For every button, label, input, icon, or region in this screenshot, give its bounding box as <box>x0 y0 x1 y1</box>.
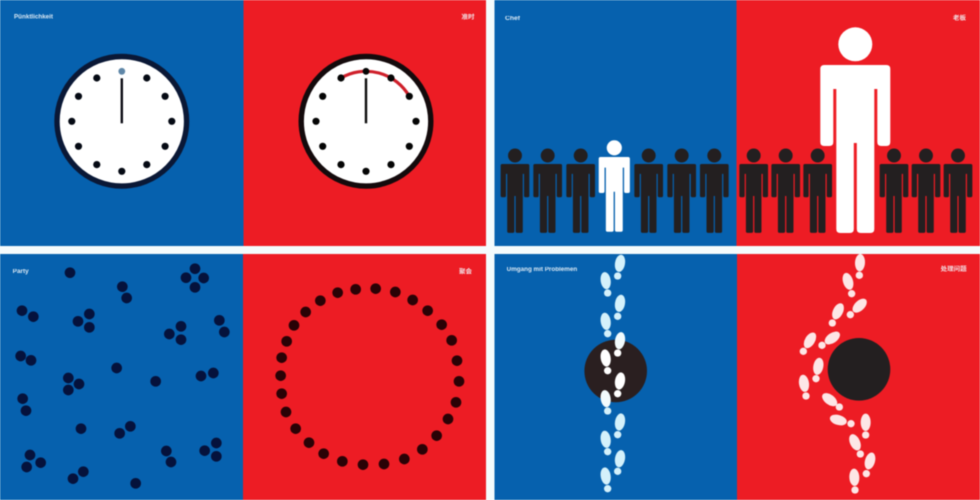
heading: Umgang mit Problemen: Umgang mit Problemen <box>507 267 578 273</box>
heading: 准时: 准时 <box>462 13 474 21</box>
heading: 老板: 老板 <box>953 14 966 22</box>
ring of dots <box>275 283 464 470</box>
heading: Party: Party <box>13 269 29 275</box>
panel: party, west <box>0 254 243 500</box>
icon: clock at exactly twelve <box>57 56 187 186</box>
panel: boss, west <box>494 0 736 246</box>
icon: black circle obstacle avoided <box>828 338 890 401</box>
panel: punctuality, west <box>0 0 244 246</box>
heading: Pünktlichkeit: Pünktlichkeit <box>14 14 53 20</box>
scattered small groups of dots <box>15 263 230 489</box>
panel: dealing with problems, west <box>494 254 737 500</box>
panel: dealing with problems, east <box>737 254 980 500</box>
panel: boss, east <box>736 0 980 246</box>
heading: 处理问题: 处理问题 <box>941 265 967 273</box>
panel: party, east <box>243 254 486 500</box>
icon: black circle obstacle <box>584 340 647 402</box>
footprints walking around the obstacle <box>798 254 877 494</box>
heading: 聚会: 聚会 <box>459 268 472 276</box>
panel: punctuality, east <box>244 0 486 246</box>
row of people with boss the same size <box>501 140 729 233</box>
heading: Chef: Chef <box>505 16 521 22</box>
icon: clock with tolerance arc <box>301 56 431 186</box>
footprints walking straight through the obstacle <box>599 254 626 492</box>
row of people with giant boss <box>739 27 972 233</box>
